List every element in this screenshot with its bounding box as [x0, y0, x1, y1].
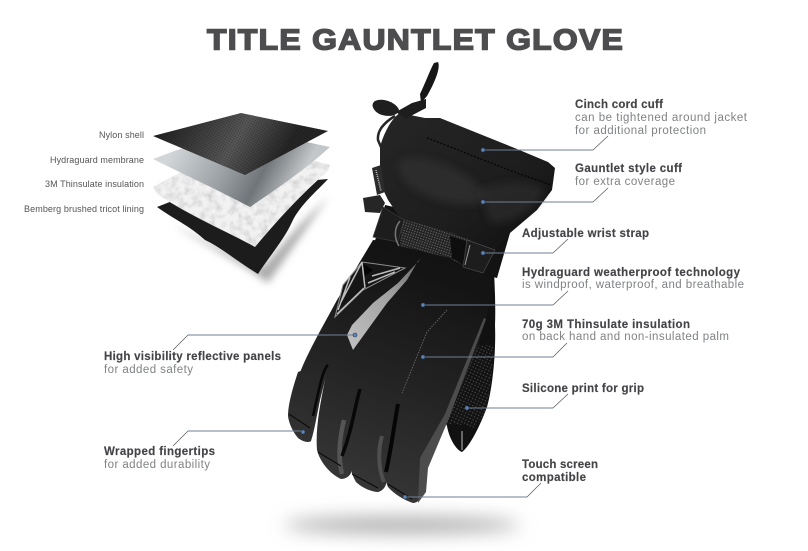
membrane layer	[153, 130, 330, 207]
cuff base	[373, 205, 510, 278]
nylon shell layer	[153, 113, 328, 175]
callout: thinsulate insulation: 70g 3M Thinsulate insulation	[522, 319, 690, 331]
cuff label tag	[372, 165, 385, 195]
callout: wrapped fingertips	[104, 430, 305, 471]
finger 3	[347, 388, 400, 492]
callout: wrapped fingertips: Wrapped fingertips	[104, 446, 215, 458]
callout: silicone print	[465, 383, 644, 410]
glove illustration	[288, 62, 555, 503]
callout: thinsulate insulation	[421, 319, 729, 359]
thumb and palm	[440, 250, 495, 452]
back of hand	[298, 240, 495, 413]
callout: cinch cord cuff	[481, 99, 748, 152]
finger 1	[288, 360, 330, 442]
callout: hydraguard: is windproof, waterproof, and breathable	[522, 279, 744, 291]
layered materials diagram	[153, 113, 330, 283]
title: TITLE GAUNTLET GLOVE	[207, 24, 623, 56]
callout: cinch cord cuff: can be tightened around jacket	[575, 112, 748, 124]
lining layer	[157, 179, 328, 283]
seam stitching	[402, 310, 447, 393]
side band	[418, 318, 486, 503]
drawcord and toggle	[373, 62, 439, 147]
finger 2	[317, 365, 362, 479]
callout: cinch cord cuff: Cinch cord cuff	[575, 99, 663, 111]
wrist strap and buckles	[363, 195, 495, 273]
reflective panel	[347, 256, 429, 350]
finger 4	[384, 350, 470, 503]
layer labels	[24, 130, 144, 214]
callout: wrapped fingertips: for added durability	[104, 459, 210, 471]
callout: reflective panels: High visibility reflective panels	[104, 351, 281, 363]
layer labels: Bemberg brushed tricot lining	[24, 204, 144, 214]
callout: adjustable wrist strap: Adjustable wrist strap	[522, 228, 649, 240]
callout: adjustable wrist strap	[481, 228, 649, 255]
callout: touch screen	[403, 459, 598, 499]
callout: hydraguard: Hydraguard weatherproof technology	[522, 267, 741, 279]
callout: gauntlet style cuff	[481, 163, 682, 204]
ground shadow	[284, 517, 520, 533]
callout: cinch cord cuff: for additional protection	[575, 125, 706, 137]
callout: touch screen: compatible	[522, 472, 586, 484]
callout: reflective panels	[104, 333, 357, 376]
logo	[335, 262, 405, 317]
cuff	[380, 113, 555, 252]
callout: thinsulate insulation: on back hand and non-insulated palm	[522, 331, 729, 343]
layer labels: 3M Thinsulate insulation	[45, 179, 144, 189]
insulation layer	[153, 140, 330, 247]
callout: reflective panels: for added safety	[104, 364, 193, 376]
layer labels: Nylon shell	[99, 130, 144, 140]
callout: hydraguard	[421, 267, 744, 307]
finger details	[289, 365, 412, 499]
callout: gauntlet style cuff: for extra coverage	[575, 176, 675, 188]
layer labels: Hydraguard membrane	[50, 155, 144, 165]
callout: silicone print: Silicone print for grip	[522, 383, 644, 395]
callout: gauntlet style cuff: Gauntlet style cuff	[575, 163, 682, 175]
callout: touch screen: Touch screen	[522, 459, 598, 471]
